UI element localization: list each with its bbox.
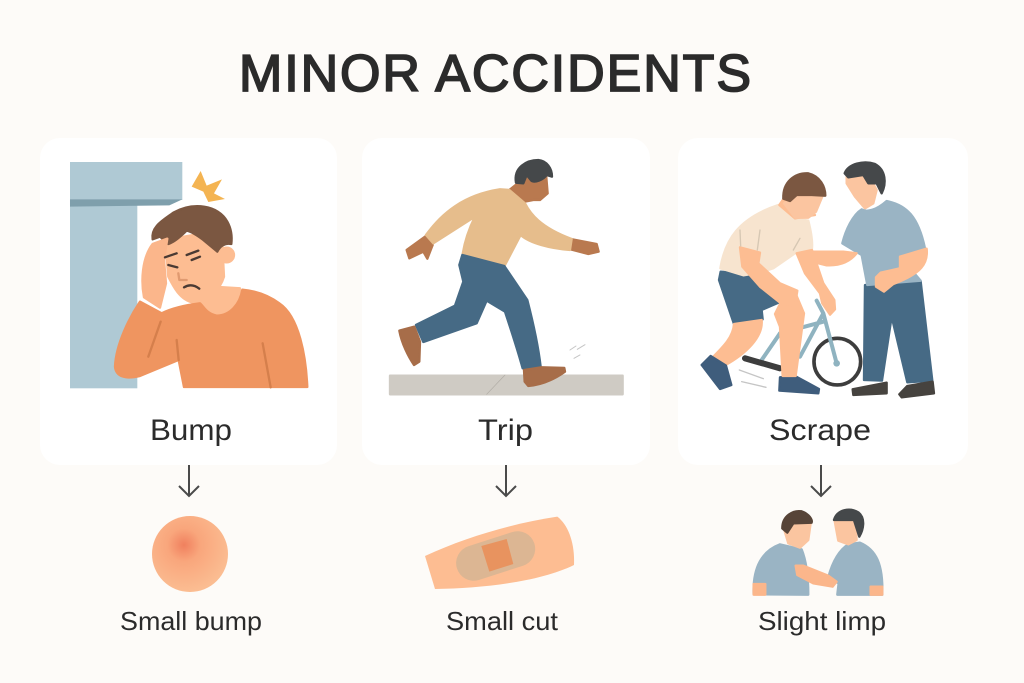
illustration: person hitting head on wall [70,162,307,388]
illustration: friend helping after bike scrape [702,162,934,397]
arrow: bump [179,465,199,496]
icon: two friends [754,510,882,595]
label: Trip: Trip [478,414,533,447]
title: MINOR ACCIDENTS [239,45,751,103]
arrow: scrape [811,465,831,496]
icon: bandage on skin [425,517,574,589]
label: Slight limp: Slight limp [758,606,886,636]
icon: small bump [152,516,228,592]
label: Small cut: Small cut [446,606,559,636]
panel: scrape [678,138,968,465]
panel: trip [362,138,650,465]
label: Bump: Bump [150,414,232,447]
illustration: man tripping [390,160,623,394]
arrow: trip [496,465,516,496]
label: Scrape: Scrape [769,414,871,447]
panel: bump [40,138,337,465]
label: Small bump: Small bump [120,606,262,636]
